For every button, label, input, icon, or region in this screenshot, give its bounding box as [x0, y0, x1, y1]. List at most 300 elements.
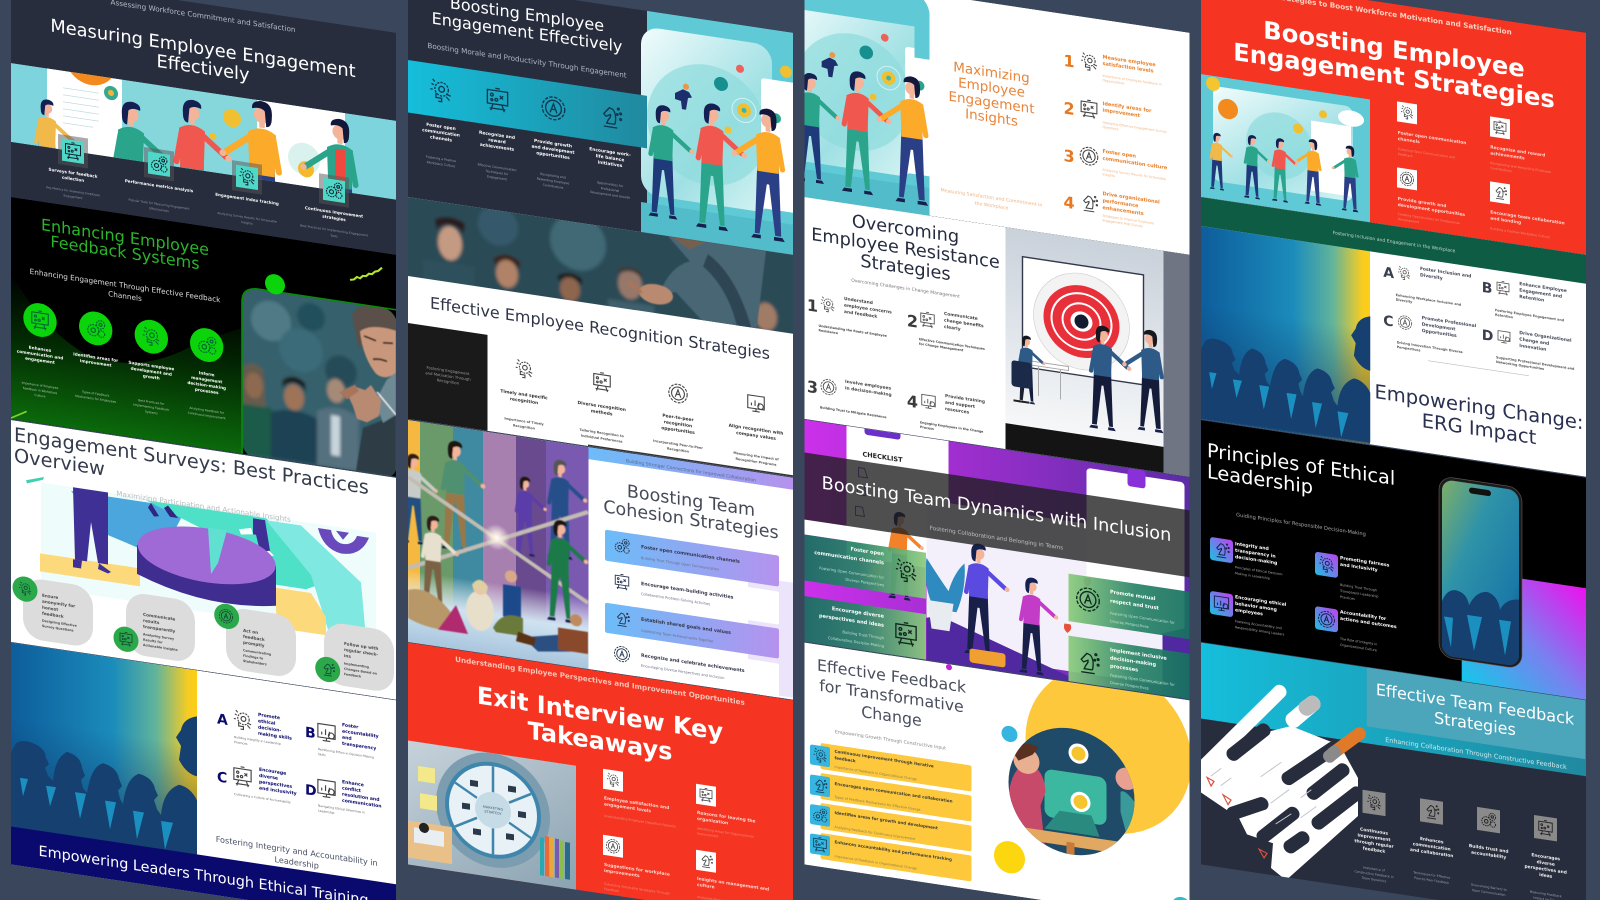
row subtext: Collaborative Problem-Solving Activities — [641, 592, 711, 606]
slide: exit interview — [408, 642, 793, 900]
subtitle: Understanding Employee Perspectives and Improvement Opportunities — [455, 655, 745, 707]
sublabels: Best Practices for — [138, 398, 165, 406]
labels: Integrity and — [1235, 541, 1269, 552]
sublabels: Responsibility Among Leaders — [1235, 625, 1285, 637]
card text: feedback — [243, 634, 265, 642]
card text: Implementing — [344, 661, 370, 669]
illustration — [641, 10, 797, 255]
illustration circle — [1004, 712, 1144, 876]
slide: measuring employee engagement — [11, 0, 396, 254]
card: implement inclusive: processes — [1110, 663, 1138, 674]
yellow circle — [1026, 655, 1192, 846]
header text: Building Stronger Connections for Improved Collaboration — [626, 458, 756, 484]
column 3 — [789, 0, 1192, 900]
title: Boosting Team — [627, 482, 755, 521]
badges — [12, 572, 340, 684]
header overlay — [804, 452, 1190, 577]
card text: honest — [42, 605, 58, 612]
row subtext: Building Trust Through Open Communication — [641, 556, 719, 572]
sublabels: Principles of Ethical Decision- — [1235, 565, 1284, 577]
sublabels — [1396, 293, 1575, 376]
labels: reward — [488, 137, 506, 146]
option C: diverse — [259, 773, 278, 782]
slide: maximizing employee engagement — [789, 0, 1190, 268]
labels: improvement — [80, 358, 111, 368]
option B: Skills — [318, 752, 326, 757]
sublabels — [818, 322, 985, 439]
sublabels — [1102, 74, 1167, 232]
title: Change — [861, 702, 922, 730]
labels: growth — [143, 373, 160, 381]
labels — [49, 167, 363, 225]
card: promote mutual respect — [1068, 574, 1190, 639]
title bar — [11, 826, 396, 900]
labels: Identifies areas for — [73, 351, 119, 363]
band text: Fostering Inclusion and Engagement in the Workplace — [1333, 230, 1455, 254]
title: Feedback Systems — [50, 232, 200, 273]
icon tile 1 — [58, 134, 88, 169]
subtitle: Guiding Principles for Responsible Decision-Making — [1236, 512, 1366, 538]
sublabels: Techniques for Effective — [1412, 870, 1450, 880]
option B: transparency — [342, 741, 376, 752]
row subtext — [834, 765, 920, 871]
card text: Communicating — [243, 648, 272, 657]
row labels: Encourages open communication and collaboration — [834, 781, 953, 804]
card text: Act on — [243, 628, 258, 635]
option D: Navigating Ethical Dilemmas in — [318, 804, 365, 815]
card text: transparently — [143, 624, 176, 634]
labels: Identify areas for — [1102, 101, 1152, 114]
header bar — [588, 447, 794, 490]
card: implement inclusive: Implement inclusive — [1110, 647, 1167, 662]
row subtext: Celebrating Team Achievements Together — [641, 629, 714, 644]
card: encourage diverse perspectives: perspectives and ideas — [819, 613, 884, 629]
card text: Designing Effective — [42, 619, 78, 628]
labels: feedback — [1363, 846, 1386, 855]
labels: recognition — [510, 396, 538, 406]
icon tile 3 — [232, 160, 262, 195]
title: Engagement Effectively — [432, 9, 623, 56]
sublabels: Engagement — [63, 193, 83, 200]
labels: improvements — [604, 868, 640, 879]
option B: Foster — [342, 722, 359, 731]
letters: C — [1383, 313, 1394, 331]
title: Cohesion Strategies — [603, 497, 779, 544]
labels: Engagement and — [1519, 287, 1562, 300]
sublabels: Creating Opportunities for Professional — [1398, 212, 1460, 225]
title: Effective Feedback — [817, 655, 967, 697]
phone — [1439, 476, 1522, 669]
lavender shadow — [748, 576, 793, 698]
title: Empowering Change: — [1374, 380, 1584, 434]
option B: B — [305, 725, 316, 742]
option B: accountability — [342, 728, 379, 740]
labels: employees — [1235, 607, 1263, 618]
slide: empowering leaders — [11, 642, 396, 900]
sublabels: Implementing Feedback — [133, 403, 170, 412]
subtitle: Fostering Integrity and Accountability in — [216, 834, 378, 868]
sublabels: Fostering Accountability and — [1235, 619, 1282, 630]
labels — [500, 388, 783, 449]
checklist illustration — [804, 414, 1190, 699]
subtitle: Enhancing Engagement Through Effective Feedback — [30, 267, 221, 305]
sublabels: for Change Management — [919, 342, 964, 352]
labels: Enhance Employee — [1519, 281, 1567, 294]
recognition icons — [516, 359, 764, 416]
sublabels: Insights — [1102, 172, 1115, 178]
icons — [1398, 266, 1510, 345]
option C — [218, 766, 296, 804]
sublabels: Workplace Culture — [427, 160, 455, 168]
labels: Foster open — [426, 122, 456, 132]
slide: overcoming employee resistance — [804, 197, 1190, 477]
sublabels: Organizations — [1102, 78, 1125, 86]
squiggle — [350, 266, 383, 281]
card: promote mutual respect: Fostering Open Communication for — [1110, 611, 1175, 625]
card text: Changes Based on — [344, 667, 378, 676]
labels: Communicate — [944, 311, 978, 322]
labels: Diversity — [1420, 272, 1443, 282]
option A: making skills — [258, 731, 292, 742]
sublabels: Questions — [1102, 125, 1119, 131]
sublabels: Engagement — [487, 174, 508, 182]
sublabels: Networking Opportunities — [1496, 360, 1544, 371]
sublabels: Understanding Employee Departure Reasons — [604, 814, 676, 829]
slide: boosting team dynamics — [804, 414, 1190, 700]
sublabels: Feedback in Workplace — [23, 386, 57, 395]
labels: through regular — [1354, 838, 1394, 850]
card text: Ensure — [42, 593, 58, 600]
labels: communication — [422, 127, 460, 139]
labels: and bonding — [1490, 215, 1521, 226]
labels: Involve employees — [845, 379, 891, 392]
labels: Foster Inclusion and — [1420, 266, 1471, 280]
crowd image — [1201, 226, 1370, 444]
labels: employee concerns — [844, 302, 892, 316]
labels: Drive Organizational — [1519, 330, 1572, 344]
labels: development and — [131, 366, 172, 377]
numbers: 3 — [1064, 146, 1075, 166]
sublabels: Analyzing Survey Results for Actionable — [1102, 168, 1166, 181]
card text: Results for — [143, 638, 163, 645]
row labels: Enhances accountability and performance tracking — [834, 839, 952, 862]
sublabels: Practices — [1340, 595, 1355, 601]
labels: Change and — [1519, 336, 1549, 347]
title: Employee — [958, 75, 1025, 101]
sublabels: Designing Effective Engagement Survey — [1102, 120, 1167, 134]
labels: Encouraging ethical — [1235, 594, 1287, 608]
slide: empowering change ERG — [1201, 197, 1587, 477]
sublabels: Development and Growth — [590, 190, 630, 200]
crowd image — [11, 642, 197, 855]
labels: achievements — [1490, 150, 1525, 162]
row subtext: Types of Feedback Mechanisms for Effective Change — [834, 795, 920, 812]
labels: opportunities — [536, 150, 570, 161]
sublabels: Organizational Culture — [1340, 643, 1377, 652]
sublabels: Strategies to Improve Employee — [1102, 214, 1154, 225]
sublabels: Techniques for — [485, 169, 509, 176]
cyan icons — [810, 744, 830, 856]
sublabels: Insights — [241, 220, 253, 226]
sublabels: Types of Feedback — [81, 390, 110, 398]
card: implement inclusive: Diverse Perspectives — [1110, 681, 1149, 691]
numbers: 2 — [907, 311, 918, 332]
sublabels — [504, 416, 779, 467]
card: foster open communication: Fostering Open Communication for — [819, 566, 884, 580]
labels: achievements — [480, 142, 515, 153]
sublabels: Incorporating Peer-to-Peer — [653, 439, 703, 450]
option A: Building Integrity in Leadership — [234, 735, 281, 746]
sublabels: Individual Preferences — [581, 434, 623, 444]
sublabels: Effective Communication — [478, 162, 516, 172]
labels: perspectives and — [1525, 864, 1567, 876]
card text: Stakeholders — [243, 659, 267, 666]
labels: initiatives — [598, 159, 623, 169]
labels: Accountability for — [1340, 609, 1387, 622]
option A: A — [217, 711, 228, 729]
labels: Foster open communication — [1398, 130, 1466, 146]
labels: satisfaction levels — [1102, 61, 1154, 75]
title: Enhancing Employee — [41, 215, 209, 259]
labels: company values — [736, 430, 776, 442]
labels — [1102, 54, 1168, 221]
labels: and development — [531, 144, 575, 156]
title: Effectively — [156, 51, 250, 86]
row labels: Continuous improvement through iterative — [834, 749, 934, 769]
metric columns — [46, 132, 369, 243]
card text: Follow up with — [344, 641, 378, 651]
card text: feedback — [42, 611, 64, 619]
marketing wheel image — [408, 740, 576, 890]
card: implement inclusive: decision-making — [1110, 655, 1156, 668]
labels: management — [191, 375, 222, 384]
sublabels — [1354, 862, 1562, 900]
card: foster open communication: communication channels — [814, 550, 884, 566]
subtitle: Measuring Satisfaction and Commitment in — [941, 187, 1042, 209]
sublabels: Rewarding Employee — [537, 177, 569, 186]
option A: decision- — [258, 724, 281, 734]
row labels: Identifies areas for growth and development — [834, 810, 938, 830]
icons — [1080, 52, 1098, 212]
row subtext: Importance of Feedback in Organizational Change — [834, 854, 917, 871]
title: Effective Employee Recognition Strategies — [430, 293, 770, 363]
title: Insights — [965, 106, 1018, 130]
card: foster open communication — [804, 534, 926, 599]
photo frame — [241, 288, 396, 454]
row text — [641, 544, 745, 674]
labels: Continuous — [1360, 827, 1388, 837]
row subtext: Importance of Feedback in Organizational Change — [834, 765, 917, 781]
sublabels: Making in Leadership — [1235, 571, 1270, 581]
option C: Encourage — [259, 767, 286, 777]
card text: Feedback — [344, 672, 362, 679]
numbers: 1 — [1064, 51, 1075, 71]
sublabels: Culture — [35, 393, 46, 399]
labels: Continuous improvement — [305, 205, 363, 219]
sublabels: Recognition — [513, 423, 536, 431]
slide: effective employee recognition — [403, 188, 798, 478]
sublabels: Measuring the Impact of — [733, 451, 779, 462]
labels: change benefits — [944, 317, 984, 329]
labels: ideas — [1539, 872, 1553, 880]
labels — [1354, 826, 1567, 882]
labels: Performance metrics analysis — [125, 178, 194, 193]
checklist pills illustration — [1201, 680, 1360, 891]
numbers — [807, 295, 918, 413]
card text: Analyzing Survey — [143, 632, 175, 641]
subtitle: Enhancing Collaboration Through Constructive Feedback — [1385, 736, 1567, 771]
card: foster open communication: Foster open — [851, 546, 884, 557]
marketing wheel image: MARKETING — [483, 805, 503, 812]
numbers: 4 — [1064, 192, 1075, 213]
checklist illustration: CHECKLIST — [862, 450, 903, 464]
icon tiles — [1397, 101, 1510, 204]
title: Strategies — [860, 251, 951, 285]
sublabels: Engagement Post-Survey — [1102, 218, 1143, 228]
card: encourage diverse perspectives: Collaborative Decision-Making — [828, 636, 885, 649]
column 4 — [1201, 0, 1588, 900]
option B: and — [342, 735, 352, 742]
option A: Promote — [258, 712, 280, 721]
row subtext: Analyzing Feedback for Continuous Improvement — [834, 825, 916, 841]
subtitle: Boosting Morale and Productivity Through Engagement — [427, 41, 627, 80]
labels — [1235, 540, 1397, 638]
card: implement inclusive: Fostering Open Communication for — [1110, 673, 1175, 687]
option C: Cultivating a Culture of Accountability — [234, 792, 291, 804]
title: for Transformative — [819, 676, 964, 716]
sublabels: Importance of Timely — [504, 416, 545, 426]
labels: engagement — [25, 356, 55, 365]
sublabels: Recognizing and — [540, 172, 566, 180]
sublabels: Perspectives — [1397, 345, 1420, 353]
title: Engagement — [948, 89, 1035, 117]
card: encourage diverse perspectives: Encourage diverse — [832, 606, 885, 620]
labels: Drive organizational — [1102, 191, 1160, 206]
labels: clearly — [944, 324, 961, 332]
sublabels: Engaging Employees in the Change — [920, 420, 984, 434]
option D: communication — [342, 798, 382, 810]
sublabels: Retention — [1495, 313, 1514, 320]
yellow rows — [820, 743, 972, 882]
title: Engagement Surveys: Best Practices — [14, 423, 369, 499]
sublabels: Recognizing and Rewarding Employee — [1490, 161, 1551, 174]
labels: communication and — [17, 349, 63, 361]
labels: in decision-making — [845, 385, 892, 398]
black side panel: Fostering Engagement — [427, 365, 470, 376]
sublabels: Overcoming Barriers to — [1471, 883, 1507, 892]
title: Takeaways — [528, 717, 672, 766]
title: Strategies — [1434, 708, 1516, 739]
subtitle: Maximizing Participation and Actionable Insights — [116, 489, 291, 524]
title: Engagement Strategies — [1233, 37, 1555, 114]
labels: Reasons for leaving the — [697, 810, 756, 825]
sublabels: Extracting Actionable Strategies Through — [604, 882, 670, 896]
subtitle: Fostering Collaboration and Belonging in Teams — [930, 526, 1063, 552]
sublabels: Constructive Feedback in — [1354, 869, 1394, 879]
sublabels: Recognition — [667, 446, 690, 454]
labels: Builds trust and — [1469, 843, 1508, 855]
slide: effective team feedback — [1201, 642, 1587, 900]
row labels: feedback — [834, 755, 856, 763]
sublabels: Contributions — [1490, 166, 1512, 173]
sublabels: Building Trust to Mitigate Resistance — [820, 405, 887, 419]
slide: principles of ethical leadership — [1201, 420, 1588, 701]
labels: organization — [697, 816, 728, 827]
labels: Suggestions for workplace — [604, 862, 670, 878]
labels: Recognize and reward — [1490, 144, 1545, 159]
sublabels: Recognition Programs — [736, 457, 777, 467]
sublabels: Importance of Employee Feedback in — [1102, 74, 1162, 87]
gradient icon tiles — [1210, 536, 1338, 633]
option D: Leadership — [318, 809, 334, 815]
labels: Provide growth and — [1398, 196, 1446, 209]
sublabels — [426, 155, 630, 200]
sublabels: Open Communication — [1472, 888, 1506, 897]
title: ERG Impact — [1422, 409, 1537, 449]
labels: Insights on management and — [697, 876, 769, 893]
subtitle: the Workplace — [975, 201, 1008, 212]
title: Employee Resistance — [811, 224, 1000, 273]
labels: diverse — [1537, 859, 1555, 868]
row subtext: Encouraging Diverse Perspectives and Inclusion — [641, 664, 724, 680]
sublabels: Fostering Employee Engagement and — [1495, 308, 1565, 323]
title: Measuring Employee Engagement — [50, 15, 356, 82]
labels: life balance — [596, 153, 624, 163]
title: Leadership — [1207, 460, 1313, 499]
labels: Align recognition with — [729, 423, 783, 437]
sublabels: Enhancing Workplace Inclusion and — [1396, 293, 1462, 307]
card text: Actionable Insights — [143, 643, 178, 652]
labels: transparency in — [1235, 548, 1276, 560]
pie illustration — [26, 474, 376, 643]
slide: effective feedback — [804, 622, 1192, 900]
labels — [17, 343, 226, 396]
title: Effective Team Feedback — [1376, 680, 1575, 729]
slide: enhancing employee feedback systems — [11, 197, 401, 486]
sublabels: Tailoring Recognition to — [580, 428, 624, 438]
sublabels — [604, 812, 754, 900]
slide: boosting team cohesion — [402, 419, 794, 700]
option D — [306, 778, 382, 814]
sublabels: Analyzing Feedback for — [189, 406, 225, 415]
option A — [217, 710, 292, 746]
sublabels — [1398, 147, 1551, 244]
labels: and feedback — [844, 309, 878, 320]
title panel — [1367, 667, 1585, 759]
labels: Employee satisfaction and — [604, 795, 669, 811]
cards — [23, 576, 394, 693]
sublabels: Building Trust Through — [1340, 583, 1377, 592]
card text: results — [143, 618, 160, 625]
option D: D — [305, 782, 317, 800]
green icons — [23, 301, 223, 364]
green band — [1201, 197, 1587, 284]
sublabels: Understanding the Roots of Employee — [818, 324, 888, 338]
subtitle: Overcoming Challenges in Change Management — [851, 278, 960, 300]
slide: boosting employee engagement strategies — [1201, 0, 1587, 255]
option D: Enhance — [342, 779, 364, 788]
row text: Recognize and celebrate achievements — [641, 653, 745, 674]
labels: Encourage work- — [589, 146, 631, 158]
sublabels: Importance of Employee — [22, 381, 58, 390]
labels: Peer-to-peer — [662, 413, 694, 423]
icon tile 2 — [144, 147, 174, 181]
sublabels: Transparent Leadership — [1339, 589, 1378, 599]
labels: decision-making — [1235, 554, 1277, 566]
labels: strategies — [322, 214, 346, 222]
subtitle: Leadership — [274, 854, 319, 871]
labels: Opportunities — [1422, 328, 1457, 339]
